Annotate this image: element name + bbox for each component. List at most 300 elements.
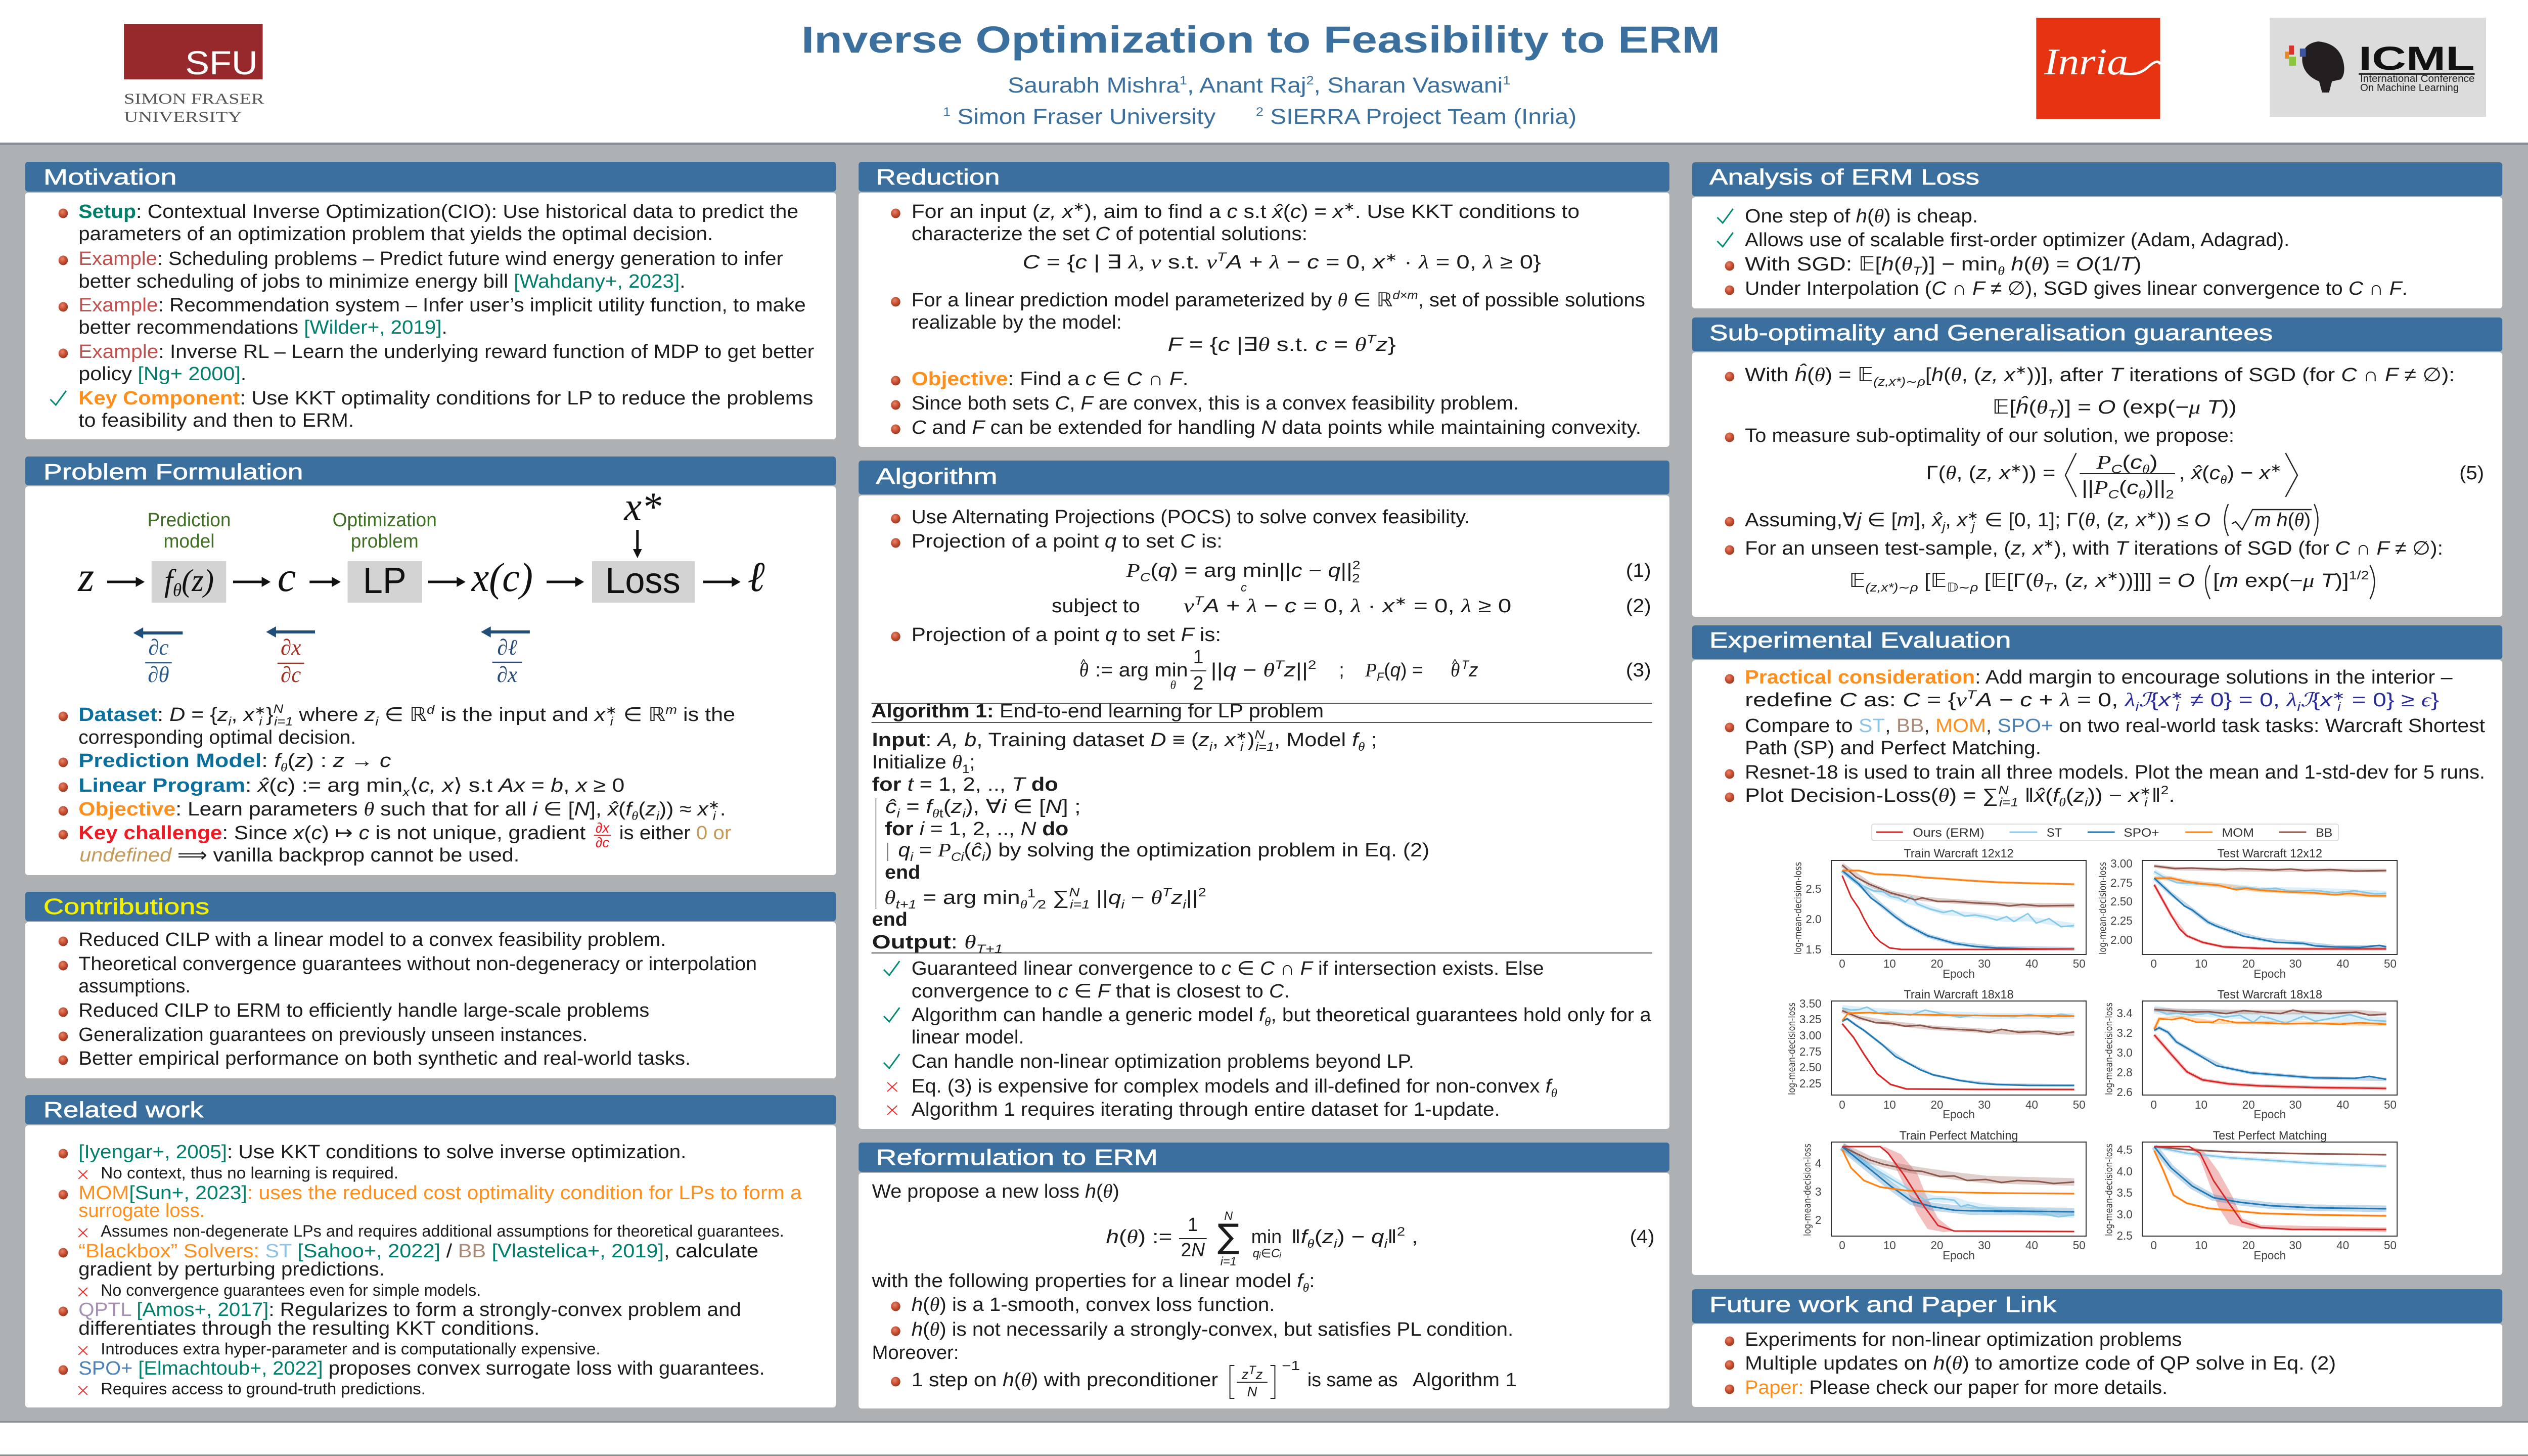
bullet list: problem definition: i xyxy=(228,715,232,729)
algorithm box: Algorithm 1: Initialize θ xyxy=(872,751,961,773)
bullet list: problem definition: Key challenge : Since x(c) ↦ c is not unique, gradient xyxy=(78,822,586,843)
text block: guarantees: ∗ xyxy=(2270,462,2282,475)
text block: guarantees: j xyxy=(1970,521,1975,534)
diagram: pipeline from z to loss: z xyxy=(77,553,94,600)
pros and cons list xyxy=(884,958,1651,1120)
text block: guarantees: For an unseen test-sample, ( z, x xyxy=(1745,537,2040,559)
heading: Motivation xyxy=(25,162,836,192)
text block: alternating projections: q) = xyxy=(1390,659,1423,680)
algorithm box: Algorithm 1: = xyxy=(900,796,926,817)
diagram: pipeline from z to loss: (z) xyxy=(182,563,214,598)
text block: alternating projections: 2 xyxy=(1352,559,1360,572)
text block: reduction to convex feasibility: A xyxy=(1225,251,1242,272)
algorithm box: Algorithm 1: t xyxy=(939,807,943,821)
algorithm box: Algorithm 1: = xyxy=(913,839,938,860)
heading: Experimental Evaluation: Experimental Evaluation xyxy=(1709,628,2011,653)
list: ERM loss properties: )] − min xyxy=(1921,253,1998,275)
line chart: Train Warcraft 18x18: 30 xyxy=(1978,1098,1991,1111)
authors: , Anant Raj xyxy=(1187,74,1306,98)
heading: Reformulation to ERM: Reformulation to ERM xyxy=(876,1146,1158,1170)
panel body xyxy=(859,495,1669,1129)
heading: Reduction xyxy=(859,162,1669,192)
algorithm box: Algorithm 1: ∑ xyxy=(1046,887,1069,908)
line chart: Train Warcraft 18x18 xyxy=(1787,988,2086,1121)
logo: SFU xyxy=(124,24,264,125)
algorithm box: Algorithm 1: θ xyxy=(1020,898,1027,912)
bullet list: problem definition: z xyxy=(645,798,656,820)
bullet list: future work: Multiple updates on h(θ) to amortize code of QP solve in Eq. (2) xyxy=(1745,1352,2336,1374)
list: ERM loss properties: θ xyxy=(1998,265,2005,278)
algorithm box: Algorithm 1: q xyxy=(898,839,910,860)
diagram: pipeline from z to loss: f xyxy=(164,563,173,598)
line chart: Test Perfect Matching: 4.0 xyxy=(2117,1165,2133,1178)
text block: alternating projections: Projection of a point q to set F is: xyxy=(912,624,1221,645)
text block: proposed loss: h(θ) := xyxy=(1106,1226,1172,1248)
bullet list: experiment setup: ∗ xyxy=(2332,690,2345,703)
line chart: Train Warcraft 18x18: log-mean-decision-loss xyxy=(1787,1003,1797,1095)
text block: guarantees: T xyxy=(2044,581,2053,595)
text block: reduction to convex feasibility: Since both sets C, F are convex, this is a convex feasibility problem. xyxy=(912,392,1519,414)
line chart: Train Warcraft 12x12: Epoch xyxy=(1943,967,1975,980)
line chart: Test Warcraft 12x12: 2.50 xyxy=(2110,895,2133,908)
line chart: Test Perfect Matching: Epoch xyxy=(2253,1249,2286,1262)
bullet list: experiment setup xyxy=(1725,666,2486,809)
text block: guarantees: C xyxy=(2111,463,2123,476)
line chart: Test Perfect Matching: Test Perfect Matching xyxy=(2213,1129,2327,1143)
bullet list: motivation items: parameters of an optimization problem that yields the optimal decision. xyxy=(78,223,713,244)
line chart: Test Warcraft 18x18: 2.8 xyxy=(2117,1066,2133,1079)
line chart: Train Warcraft 12x12: 20 xyxy=(1931,957,1944,970)
line chart: Train Warcraft 12x12: 0 xyxy=(1839,957,1845,970)
line chart: Test Warcraft 18x18: 3.2 xyxy=(2117,1026,2133,1039)
text block: guarantees: θ xyxy=(2139,488,2146,502)
line chart: Test Warcraft 18x18: 3.0 xyxy=(2117,1046,2133,1059)
poster header xyxy=(124,18,2486,129)
line chart: Test Warcraft 18x18: Epoch xyxy=(2253,1108,2286,1121)
algorithm box: Algorithm 1: i xyxy=(1209,741,1213,754)
bullet list: experiment setup: ∗ xyxy=(2140,785,2151,798)
text block: guarantees: c xyxy=(2127,477,2139,498)
text block: alternating projections: + λ − c = 0, λ · x xyxy=(1225,595,1392,617)
diagram: pipeline from z to loss: model xyxy=(164,530,215,552)
text block: alternating projections: Use Alternating Projections (POCS) to solve convex feasibility. xyxy=(912,506,1470,527)
bullet list: related work items: surrogate loss. xyxy=(78,1200,205,1221)
bullet list: experiment setup: i xyxy=(2176,701,2180,714)
bullet list: experiment setup: redefine C as: C = { ν xyxy=(1745,689,1964,711)
text block: guarantees: [ xyxy=(1925,364,1932,385)
text block: reduction to convex feasibility: characterize the set C of potential solutions: xyxy=(912,223,1307,244)
panel: Reduction xyxy=(859,162,1669,447)
text block: guarantees: ∗ xyxy=(2015,364,2027,377)
bullet list: experiment setup: θ xyxy=(2059,796,2066,809)
line chart: Test Perfect Matching: 3.5 xyxy=(2117,1186,2133,1199)
text block: guarantees: P xyxy=(2096,452,2111,473)
list: ERM loss properties: Under Interpolation ( C ∩ F ≠ ∅), SGD gives linear convergence to C ∩ F. xyxy=(1745,278,2408,299)
bullet list: experiment setup: )) − xyxy=(2088,785,2128,806)
line chart: Train Perfect Matching: 3 xyxy=(1815,1185,1822,1198)
algorithm box: Algorithm 1: − xyxy=(1124,887,1151,908)
list: ERM loss properties: With SGD: 𝔼[ h(θ xyxy=(1745,253,1911,275)
line chart: Test Perfect Matching: 2.5 xyxy=(2117,1229,2133,1242)
pros and cons list: Eq. (3) is expensive for complex models and ill-defined for non-convex f xyxy=(912,1075,1551,1097)
text block: reduction to convex feasibility: For an input ( z, x xyxy=(912,201,1069,222)
algorithm box: Algorithm 1: end xyxy=(885,861,920,883)
algorithm box: Algorithm 1: ∗ xyxy=(1236,730,1247,743)
bullet list: problem definition: ∗ xyxy=(254,704,266,717)
algorithm box: Algorithm 1: θ xyxy=(884,888,896,908)
panel: Sub-optimality and Generalisation guarantees xyxy=(1692,317,2502,617)
text block: guarantees: z, x xyxy=(2071,570,2107,591)
text block: alternating projections: q) = arg min|| c − q|| xyxy=(1158,560,1350,581)
panel body xyxy=(25,193,836,439)
bullet list: problem definition: θ xyxy=(631,810,639,823)
text block: proposed loss: (4) xyxy=(1630,1226,1654,1247)
heading: Related work xyxy=(25,1095,836,1124)
line chart: Test Warcraft 18x18: 10 xyxy=(2195,1098,2207,1111)
diagram: pipeline from z to loss: Loss xyxy=(605,561,681,601)
bullet list: contributions: Generalization guarantees on previously unseen instances. xyxy=(78,1024,588,1045)
panel body xyxy=(1692,197,2502,308)
bullet list: problem definition: , xyxy=(231,704,243,725)
panel body xyxy=(25,1125,836,1407)
text block: alternating projections: ||q − θ xyxy=(1211,659,1272,681)
heading: Contributions: Contributions xyxy=(43,895,209,919)
diagram: pipeline from z to loss: x(c) xyxy=(471,556,533,600)
logo: ICML: ICML xyxy=(2359,39,2475,77)
text block: proposed loss: 1 xyxy=(1188,1214,1198,1235)
bullet list: problem definition: x xyxy=(242,704,255,725)
line chart: Train Perfect Matching: log-mean-decision-loss xyxy=(1802,1144,1813,1236)
line chart: Test Perfect Matching: 30 xyxy=(2289,1239,2302,1252)
diagram: backward gradient arrows: ∂c xyxy=(148,635,169,660)
bullet list: related work items: “Blackbox” Solvers: ST [Sahoo+, 2022] / BB [Vlastelica+, 2019] , calculate xyxy=(78,1240,758,1261)
text block: guarantees: T xyxy=(2048,408,2058,421)
bullet list: experiment setup: ∗ xyxy=(2171,690,2183,703)
text block: alternating projections: (2) xyxy=(1626,595,1651,616)
pros and cons list: θ xyxy=(1265,1016,1271,1029)
line chart: Train Perfect Matching: 10 xyxy=(1883,1239,1896,1252)
text block: proposed loss: θ xyxy=(1307,1238,1315,1251)
bullet list: problem definition xyxy=(59,703,735,866)
line chart: Train Warcraft 12x12: log-mean-decision-loss xyxy=(1793,862,1803,954)
bullet list: motivation items: better recommendations [Wilder+, 2019] . xyxy=(78,316,447,338)
chart legend: BB xyxy=(2316,827,2332,840)
chart legend: ST xyxy=(2047,827,2062,840)
text block: guarantees: T iterations of SGD (for C ∩ F ≠ ∅): xyxy=(2115,537,2438,559)
text block: proposed loss: qᵢ∈Cᵢ xyxy=(1253,1247,1282,1260)
panel body xyxy=(25,486,836,875)
line chart: Test Warcraft 12x12: 20 xyxy=(2242,957,2255,970)
heading: Future work and Paper Link xyxy=(1692,1289,2502,1323)
text block: guarantees: ∗ xyxy=(2107,570,2118,583)
affiliations: Simon Fraser University xyxy=(951,105,1256,129)
bullet list: experiment setup: i xyxy=(2337,701,2341,714)
text block: reduction to convex feasibility: . Use KKT conditions to xyxy=(1355,201,1579,222)
text block: guarantees: (z,x*)∼ρ xyxy=(1865,581,1918,595)
bullet list: experiment setup: x̂(f xyxy=(2034,785,2058,806)
text block: guarantees: (5) xyxy=(2459,462,2484,483)
algorithm box: Algorithm 1: , Model xyxy=(1274,729,1352,750)
bullet list: problem definition: Linear Program : x̂(c) := arg min xyxy=(78,775,383,796)
panel body xyxy=(859,1173,1669,1408)
bullet list: experiment setup: {x xyxy=(2312,689,2329,710)
algorithm box: Algorithm 1: q xyxy=(1108,887,1121,908)
algorithm box: Algorithm 1: Input : A, b , Training dataset D ≡ (z xyxy=(872,729,1208,750)
algorithm box: Algorithm 1: ) xyxy=(1247,729,1254,750)
text block: alternating projections: θ xyxy=(1079,660,1089,681)
bullet list: problem definition: ∗ xyxy=(708,799,719,812)
line chart: Test Warcraft 12x12: 3.00 xyxy=(2110,857,2133,870)
algorithm box: Algorithm 1: N xyxy=(1254,729,1265,742)
algorithm box: Algorithm 1: N xyxy=(1069,886,1080,899)
pros and cons list: convergence to c ∈ F that is closest to C. xyxy=(912,980,1290,1002)
line chart: Test Perfect Matching xyxy=(2104,1129,2397,1262)
text block: guarantees: θ xyxy=(2033,571,2044,592)
text block: reduction to convex feasibility: ∗ xyxy=(1073,201,1085,214)
text block: guarantees: )] = xyxy=(2057,396,2098,418)
text block: reduction to convex feasibility: T xyxy=(1367,333,1377,346)
line chart: Test Perfect Matching: 0 xyxy=(2151,1239,2157,1252)
algorithm box: Algorithm 1: θ xyxy=(1151,888,1162,908)
line chart: Test Warcraft 18x18: 40 xyxy=(2336,1098,2349,1111)
list: ERM loss properties: Allows use of scalable first-order optimizer (Adam, Adagrad). xyxy=(1745,229,2289,250)
line chart: Test Perfect Matching: 4.5 xyxy=(2117,1143,2133,1156)
diagram: pipeline from z to loss: Optimization xyxy=(333,509,437,530)
line chart: Train Warcraft 18x18: 50 xyxy=(2073,1098,2086,1111)
heading: Algorithm: Algorithm xyxy=(876,465,998,489)
text block: proposed loss: h(θ) is not necessarily a strongly-convex, but satisfies PL condition. xyxy=(912,1318,1513,1340)
bullet list: related work items: Requires access to ground-truth predictions. xyxy=(101,1380,426,1398)
text block: proposed loss: with the following properties for a linear model f xyxy=(872,1270,1302,1291)
bullet list: motivation items: policy [Ng+ 2000] . xyxy=(78,363,246,384)
logo: ICML: On Machine Learning xyxy=(2360,82,2459,94)
bullet list: problem definition: x xyxy=(696,798,709,820)
line chart: Train Warcraft 18x18: 2.75 xyxy=(1799,1045,1822,1058)
bullet list: related work items: Assumes non-degenerate LPs and requires additional assumptions for theoretical guarantees. xyxy=(101,1222,784,1240)
algorithm box: Algorithm 1: end xyxy=(872,908,908,930)
text block: proposed loss: Moreover: xyxy=(872,1342,959,1363)
algorithm box: Algorithm 1: t+1 xyxy=(896,898,917,912)
bullet list: experiment setup: ‖ xyxy=(2018,785,2034,806)
text block: guarantees: ∗ xyxy=(1967,510,1978,523)
line chart: Test Warcraft 18x18: Test Warcraft 18x18 xyxy=(2217,988,2322,1002)
text block: proposed loss: 2N xyxy=(1181,1239,1205,1260)
bullet list: problem definition: θ xyxy=(281,761,288,775)
line chart: Train Warcraft 12x12: 2.0 xyxy=(1805,913,1822,926)
chart legend: Ours (ERM) xyxy=(1913,827,1984,840)
text block: guarantees: ), with xyxy=(2054,537,2115,559)
bullet list: future work: Experiments for non-linear optimization problems xyxy=(1745,1329,2182,1350)
text block: proposed loss: , xyxy=(1405,1226,1418,1247)
bullet list: problem definition: corresponding optimal decision. xyxy=(78,726,356,748)
text block: alternating projections: ν xyxy=(1184,596,1194,617)
algorithm box: Algorithm 1: i xyxy=(910,851,914,864)
text block: guarantees: j xyxy=(1940,521,1946,534)
algorithm box: Algorithm 1: 2 xyxy=(1198,886,1206,899)
text block: reduction to convex feasibility: ∗ xyxy=(1385,251,1397,264)
algorithm box: Algorithm 1: ; xyxy=(1365,729,1377,750)
bullet list: problem definition: i xyxy=(375,715,379,729)
text block: alternating projections: 1 xyxy=(1193,646,1203,667)
algorithm box: Algorithm 1: Output : θ xyxy=(872,931,973,953)
text block: guarantees: , xyxy=(1945,509,1957,530)
panel body xyxy=(25,922,836,1078)
line chart: Test Perfect Matching: 10 xyxy=(2195,1239,2207,1252)
logo: Inria xyxy=(2036,18,2160,119)
bullet list: problem definition: is either 0 or xyxy=(619,822,731,843)
text block: reduction to convex feasibility xyxy=(891,201,1645,438)
logo: SFU: SIMON FRASER xyxy=(124,91,264,107)
text block: guarantees: θ xyxy=(2220,474,2227,487)
line chart: Train Warcraft 18x18: 0 xyxy=(1839,1098,1845,1111)
pros and cons list: Algorithm can handle a generic model f xyxy=(912,1004,1264,1025)
diagram: pipeline from z to loss: ℓ xyxy=(748,553,765,600)
line chart: Test Perfect Matching: 3.0 xyxy=(2117,1208,2133,1221)
text block: alternating projections: ( xyxy=(1384,659,1390,680)
text block: reduction to convex feasibility: λ = 0, λ ≥ 0} xyxy=(1419,251,1531,273)
heading: Motivation: Motivation xyxy=(43,165,177,190)
diagram: backward gradient arrows: ∂x xyxy=(497,663,517,687)
diagram: pipeline from z to loss: θ xyxy=(173,580,182,600)
bullet list: problem definition: ( xyxy=(288,750,295,771)
heading: Problem Formulation xyxy=(25,457,836,485)
line chart: Train Perfect Matching: 30 xyxy=(1978,1239,1991,1252)
bullet list: experiment setup: z xyxy=(2073,785,2085,806)
text block: proposed loss: N xyxy=(1224,1210,1233,1223)
panel body xyxy=(859,193,1669,447)
bullet list: contributions: Reduced CILP to ERM to efficiently handle large-scale problems xyxy=(78,999,649,1021)
text block: reduction to convex feasibility: realizable by the model: xyxy=(912,311,1122,333)
line chart: Test Warcraft 18x18: 2.6 xyxy=(2117,1085,2133,1099)
text block: proposed loss: z xyxy=(1242,1367,1248,1382)
authors: 1 xyxy=(1180,74,1187,87)
text block: proposed loss: : xyxy=(1309,1270,1315,1291)
text block: alternating projections: ( xyxy=(1150,560,1158,581)
bullet list: related work items: MOM[Sun+, 2023] : uses the reduced cost optimality condition for LPs to form a xyxy=(78,1182,802,1203)
diagram: pipeline from z to loss: x* xyxy=(623,485,662,529)
line chart: Test Perfect Matching: log-mean-decision-loss xyxy=(2104,1144,2115,1236)
text block: guarantees: [𝔼 xyxy=(1918,570,1947,591)
bullet list: experiment setup: i xyxy=(2136,701,2139,714)
text block: guarantees: )) ≤ xyxy=(2157,509,2194,530)
diagram: pipeline from z to loss: LP xyxy=(363,561,407,601)
bullet list: problem definition: i xyxy=(259,715,262,729)
text block: guarantees: ( xyxy=(2119,477,2127,498)
diagram: backward gradient arrows xyxy=(133,626,530,687)
bullet list: problem definition: ( xyxy=(638,798,646,820)
text block: reduction to convex feasibility: + λ − c = 0, x xyxy=(1247,251,1382,273)
bullet list: problem definition: ∈ ℝ xyxy=(617,704,666,725)
text block: guarantees: , ( xyxy=(2052,570,2072,591)
algorithm box: Algorithm 1: i ∈ [ N] ; xyxy=(1002,796,1077,817)
bullet list: experiment setup: i=1 xyxy=(1999,796,2018,809)
algorithm box: Algorithm 1: ( xyxy=(964,839,971,860)
text block: guarantees: ) − xyxy=(2227,462,2259,483)
text block: alternating projections: 2 xyxy=(1193,672,1203,694)
text block: guarantees: m h(θ) xyxy=(2254,509,2311,531)
text block: alternating projections: 2 xyxy=(1352,572,1360,585)
bullet list: problem definition: d xyxy=(427,704,435,717)
line chart: Train Perfect Matching: 2 xyxy=(1815,1213,1822,1226)
text block: guarantees xyxy=(1725,364,2484,599)
heading: Sub-optimality and Generalisation guarantees xyxy=(1692,317,2502,351)
bullet list: problem definition: Dataset : D = {z xyxy=(78,704,227,725)
algorithm box: Algorithm 1: , xyxy=(1212,729,1225,750)
bullet list: experiment setup: − c + λ = 0, λ xyxy=(1998,689,2133,711)
text block: alternating projections: P xyxy=(1365,660,1377,681)
logo: Inria: Inria xyxy=(2044,41,2128,82)
text block: guarantees: ))]]] = xyxy=(2118,570,2178,591)
line chart: Test Warcraft 18x18: 50 xyxy=(2384,1098,2397,1111)
panel: Future work and Paper Link xyxy=(1692,1289,2502,1407)
bullet list: experiment setup: 2 xyxy=(2161,784,2169,797)
text block: alternating projections: (1) xyxy=(1626,560,1651,581)
chart legend xyxy=(1872,824,2338,841)
bullet list: experiment setup: = 0} ≥ xyxy=(2345,689,2421,710)
line chart: Train Warcraft 18x18: 40 xyxy=(2025,1098,2038,1111)
line chart: Train Warcraft 12x12: 40 xyxy=(2025,957,2038,970)
text block: guarantees: (z,x*)∼ρ xyxy=(1873,376,1925,389)
text block: alternating projections xyxy=(891,506,1651,694)
algorithm box: Algorithm 1: T xyxy=(1162,886,1172,899)
bullet list: problem definition: x xyxy=(402,786,411,799)
text block: alternating projections: Projection of a point q to set C is: xyxy=(912,530,1223,552)
text block: proposed loss: q xyxy=(1371,1226,1384,1247)
bullet list: related work items: No context, thus no learning is required. xyxy=(101,1164,398,1182)
list: ERM loss properties: One step of h(θ) is cheap. xyxy=(1745,205,1978,227)
line chart: Train Warcraft 18x18: 3.25 xyxy=(1799,1013,1822,1026)
line chart: Train Perfect Matching: Epoch xyxy=(1943,1249,1975,1262)
pros and cons list: , but theoretical guarantees hold only for a xyxy=(1271,1004,1651,1025)
diagram: backward gradient arrows: ∂ℓ xyxy=(497,635,517,660)
line chart: Test Warcraft 12x12 xyxy=(2098,847,2397,980)
text block: reduction to convex feasibility: C = { c | ∃ λ, ν s.t. ν xyxy=(1022,251,1215,273)
affiliations: SIERRA Project Team (Inria) xyxy=(1263,105,1576,129)
bullet list: contributions: Theoretical convergence guarantees without non-degeneracy or interpolation xyxy=(78,953,757,974)
heading: Reduction: Reduction xyxy=(876,165,1000,190)
text block: proposed loss: is same as xyxy=(1307,1369,1398,1390)
line chart: Train Perfect Matching: 20 xyxy=(1931,1239,1944,1252)
text block: proposed loss: i=1 xyxy=(1221,1255,1237,1268)
algorithm box: Algorithm 1: i xyxy=(1240,741,1244,754)
text block: guarantees: , x̂(c xyxy=(2179,462,2219,483)
algorithm box: Algorithm 1: ( xyxy=(943,796,951,817)
list: ERM loss properties: h(θ) = O(1/T) xyxy=(2011,253,2140,275)
heading: Algorithm xyxy=(859,461,1669,494)
text block: guarantees: h(θ, (z, x xyxy=(1931,364,2010,386)
text block: guarantees: With ĥ(θ) = 𝔼 xyxy=(1745,364,1867,386)
line chart: Test Warcraft 12x12: 2.00 xyxy=(2110,933,2133,946)
algorithm box: Algorithm 1: || xyxy=(1090,887,1108,908)
bullet list: problem definition: c, x ⟩ s.t Ax = b, x ≥ 0 xyxy=(419,775,618,796)
bullet list: problem definition: i xyxy=(713,810,716,823)
logo: ICML xyxy=(2270,18,2486,117)
text block: guarantees: ) xyxy=(2150,451,2158,473)
text block: guarantees: c xyxy=(2130,451,2142,473)
text block: alternating projections: ∗ xyxy=(1394,595,1407,608)
text block: reduction to convex feasibility: c s.t x̂(c) = x xyxy=(1227,201,1342,222)
panel: Related work xyxy=(25,1095,836,1407)
line chart: Train Perfect Matching: 0 xyxy=(1839,1239,1845,1252)
authors: Saurabh Mishra xyxy=(1008,74,1157,98)
text block: guarantees: ∗ xyxy=(2043,537,2054,551)
text block: alternating projections: A xyxy=(1202,595,1220,616)
text block: alternating projections: T xyxy=(1275,659,1285,672)
algorithm box: Algorithm 1: Algorithm 1: End-to-end learning for LP problem xyxy=(872,700,1324,721)
authors: 1 xyxy=(1503,74,1510,87)
bullet list: experiment setup: λ xyxy=(2286,690,2297,711)
text block: guarantees: [𝔼[Γ( xyxy=(1978,570,2033,591)
